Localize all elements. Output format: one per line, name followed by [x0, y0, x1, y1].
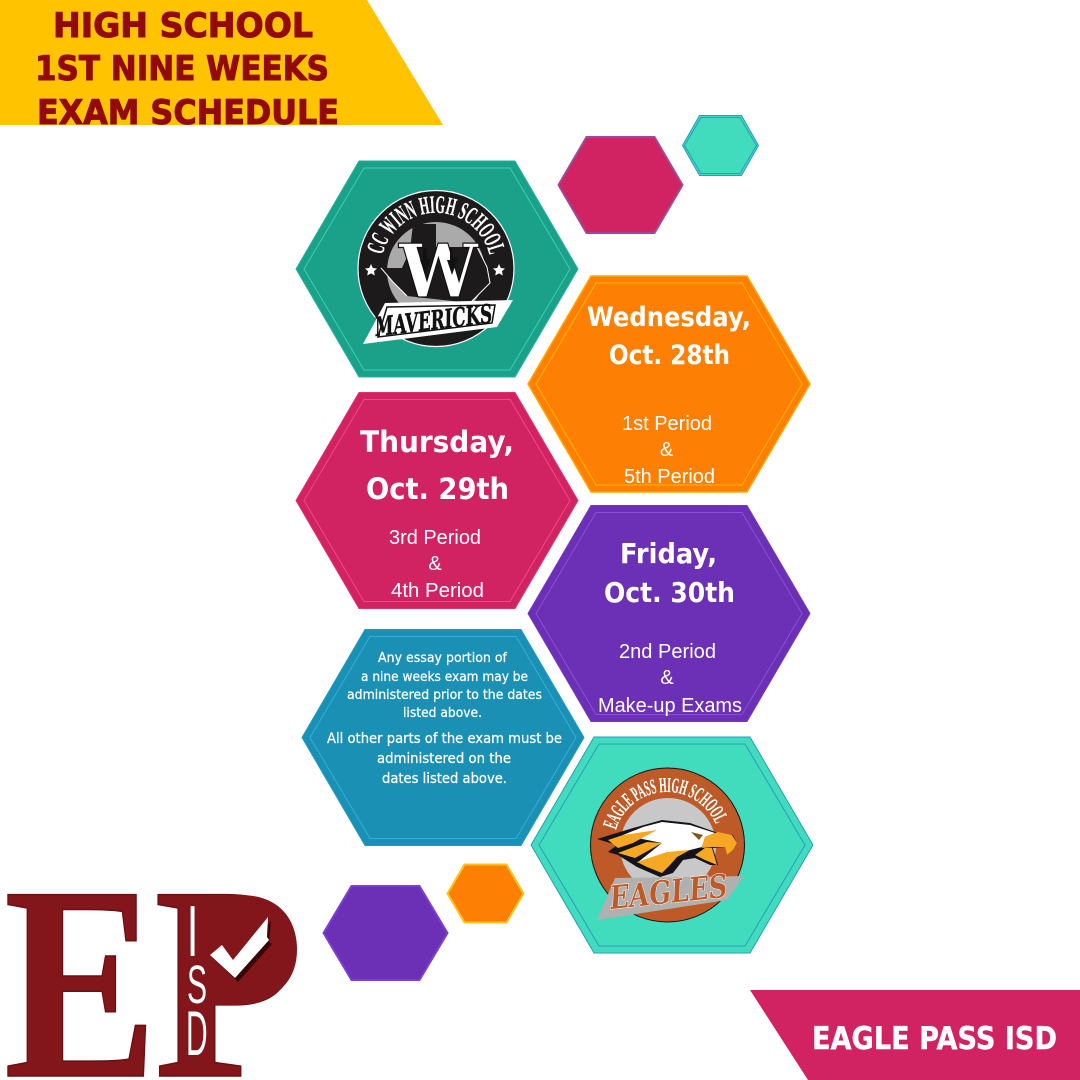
text block: Wednesday periods: 1st Period [622, 413, 712, 435]
eagle head [597, 820, 737, 877]
text block: Wednesday periods: & [660, 439, 674, 461]
ISD lettering and check mark: D [186, 999, 208, 1069]
decorative hexagon: magenta [558, 137, 682, 233]
heading: Friday date [604, 537, 735, 609]
panel: Friday schedule hexagon [528, 506, 810, 722]
heading: Wednesday date: Oct. 28th [609, 340, 730, 371]
panel: Thursday schedule hexagon [296, 392, 578, 608]
text block: Friday periods: Make-up Exams [598, 695, 742, 717]
text block: essay note: administered prior to the dates [347, 688, 542, 703]
heading: Thursday date: Oct. 29th [366, 472, 509, 506]
decorative hexagon: purple [324, 886, 448, 980]
heading: Friday date: Friday, [620, 537, 717, 570]
panel: essay note hexagon [302, 630, 584, 846]
decorative hexagon: small teal [682, 116, 758, 176]
text block: Wednesday periods [622, 413, 715, 488]
title banner: 1ST NINE WEEKS [35, 49, 329, 89]
text block: Thursday periods: 3rd Period [389, 527, 481, 549]
text block: essay note: administered on the [377, 751, 511, 767]
text block: Thursday periods: 4th Period [391, 580, 484, 602]
text block: Wednesday periods: 5th Period [624, 466, 715, 488]
text block: Friday periods [598, 641, 742, 717]
icon: Eagles logo: EAGLES [607, 867, 729, 917]
icon: Eagles logo [590, 768, 745, 922]
heading: Thursday date: Thursday, [360, 425, 514, 459]
heading: Friday date: Oct. 30th [604, 576, 735, 609]
title banner [0, 0, 443, 133]
heading: Wednesday date [587, 302, 751, 371]
decorative hexagon: small orange [448, 864, 524, 922]
text block: essay note: a nine weeks exam may be [361, 670, 528, 685]
ISD lettering and check mark: S [187, 955, 207, 1015]
footer banner: Eagle Pass ISD [750, 990, 1080, 1080]
logo: EP ISD [4, 880, 300, 1080]
text block: essay note [327, 651, 562, 787]
title banner: EXAM SCHEDULE [37, 93, 339, 133]
icon: Mavericks logo [357, 190, 515, 348]
text block: essay note: dates listed above. [382, 771, 507, 787]
text block: Friday periods: 2nd Period [619, 641, 716, 663]
text block: Thursday periods: & [428, 553, 442, 575]
text block: essay note: Any essay portion of [378, 651, 507, 666]
text block: Friday periods: & [660, 667, 674, 689]
text block: essay note: listed above. [403, 706, 482, 721]
text block: Thursday periods [389, 527, 484, 602]
icon: Mavericks logo: W [398, 229, 479, 315]
panel: Eagle Pass High School logo hexagon [530, 736, 814, 954]
icon: Mavericks logo: MAVERICKS [373, 300, 494, 343]
icon: Eagles logo: EAGLE PASS HIGH SCHOOL [602, 778, 727, 830]
ISD lettering and check mark: I [188, 892, 197, 970]
heading: Wednesday date: Wednesday, [587, 302, 751, 333]
ISD lettering and check mark [186, 892, 297, 1069]
panel: CC Winn High School logo hexagon [296, 160, 578, 378]
text block: essay note: All other parts of the exam must be [327, 731, 562, 747]
panel: Wednesday schedule hexagon [528, 276, 810, 492]
heading: Thursday date [360, 425, 514, 506]
title banner: HIGH SCHOOL [53, 6, 313, 46]
icon: Mavericks logo: CC WINN HIGH SCHOOL [368, 196, 504, 254]
